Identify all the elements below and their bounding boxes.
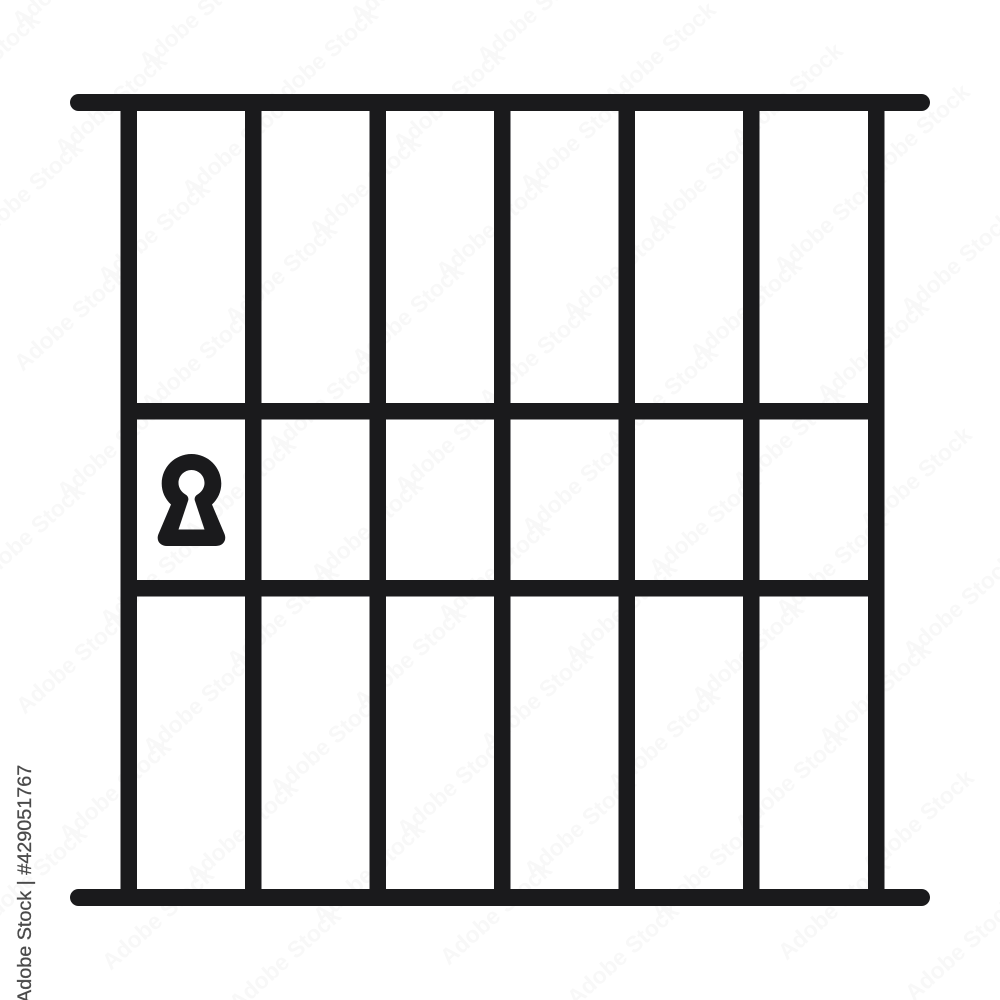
faint stock watermarks: Adobe Stock [517,426,639,540]
faint stock watermarks: Adobe Stock [726,37,848,151]
faint stock watermarks: Adobe Stock [388,42,510,156]
faint stock watermarks: Adobe Stock [431,170,553,284]
faint stock watermarks: Adobe Stock [730,723,852,837]
faint stock watermarks: Adobe Stock [603,682,725,796]
faint stock watermarks: Adobe Stock [265,687,387,801]
faint stock watermarks: Adobe Stock [685,252,807,366]
faint stock watermarks: Adobe Stock [181,774,303,888]
faint stock watermarks: Adobe Stock [853,78,975,192]
faint stock watermarks: Adobe Stock [97,861,219,975]
bottom rail [70,889,930,906]
faint stock watermarks: Adobe Stock [138,646,260,760]
faint stock watermarks: Adobe Stock [601,339,723,453]
faint stock watermarks: Adobe Stock [642,124,764,238]
faint stock watermarks: Adobe Stock [646,810,768,924]
faint stock watermarks: Adobe Stock [177,88,299,202]
top rail [70,94,930,111]
faint stock watermarks: Adobe Stock [855,421,977,535]
faint stock watermarks: Adobe Stock [263,344,385,458]
icon: keyhole [158,454,225,546]
faint stock watermarks: Adobe Stock [52,390,174,504]
faint stock watermarks: Adobe Stock [9,262,131,376]
faint stock watermarks: Adobe Stock [857,764,979,878]
faint stock watermarks: Adobe Stock [560,554,682,668]
faint stock watermarks: Adobe Stock [179,431,301,545]
faint stock watermarks: Adobe Stock [349,600,471,714]
faint stock watermarks: Adobe Stock [347,257,469,371]
faint stock watermarks: Adobe Stock [474,298,596,412]
faint stock watermarks: Adobe Stock [558,211,680,325]
faint stock watermarks: Adobe Stock [11,605,133,719]
faint stock watermarks: Adobe Stock [476,641,598,755]
faint stock watermarks: Adobe Stock [814,636,936,750]
prison bars cage [70,94,930,906]
lower lock crossbar [125,580,880,596]
faint stock watermarks: Adobe Stock [519,769,641,883]
faint stock watermarks: Adobe Stock [644,467,766,581]
faint stock watermarks: Adobe Stock [433,513,555,627]
faint stock watermarks: Adobe Stock [390,385,512,499]
faint stock watermarks: Adobe Stock [435,856,557,970]
upper lock crossbar [125,403,880,420]
faint stock watermarks: Adobe Stock [95,518,217,632]
faint stock watermarks: Adobe Stock [392,728,514,842]
faint stock watermarks: Adobe Stock [261,1,383,115]
faint stock watermarks: Adobe Stock [222,559,344,673]
faint stock watermarks: Adobe Stock [687,595,809,709]
faint stock watermarks: Adobe Stock [93,175,215,289]
faint stock watermarks: Adobe Stock [812,293,934,407]
faint stock watermarks: Adobe Stock [306,472,428,586]
faint stock watermarks: Adobe Stock [771,508,893,622]
faint stock watermarks: Adobe Stock [50,47,172,161]
faint stock watermarks: Adobe Stock [773,851,895,965]
faint stock watermarks: Adobe Stock [728,380,850,494]
faint stock watermarks: Adobe Stock [308,815,430,929]
faint stock watermarks: Adobe Stock [136,303,258,417]
vertical stock credit text: Adobe Stock | #429051767 [14,765,36,1000]
faint stock watermarks: Adobe Stock [515,83,637,197]
faint stock watermarks: Adobe Stock [304,129,426,243]
vertical bars [120,102,884,898]
faint stock watermarks: Adobe Stock [220,216,342,330]
faint stock watermarks: Adobe Stock [54,733,176,847]
faint stock watermarks: Adobe Stock [769,165,891,279]
